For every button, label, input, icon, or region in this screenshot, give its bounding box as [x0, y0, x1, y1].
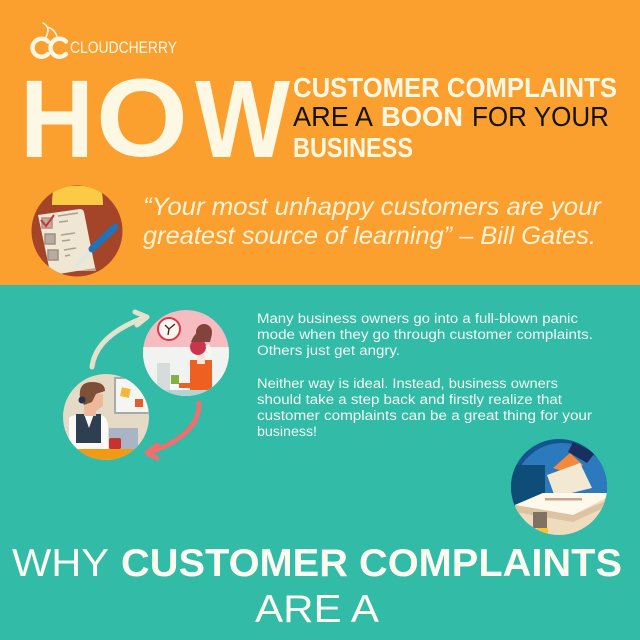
- icon: checklist and pen: [32, 186, 122, 276]
- icon: upset customer on phone: [143, 310, 229, 397]
- arrow: curved to lower circle: [147, 403, 199, 458]
- title line 2: ARE A: [293, 101, 374, 132]
- paragraph 1: Many business owners go into a full-blown panic: [257, 311, 578, 326]
- heading: why customer complaints: WHY: [12, 542, 109, 585]
- logo: CloudCherry: [33, 23, 177, 57]
- paragraph 1: [257, 311, 593, 358]
- icon: support agent with headset: [63, 374, 155, 461]
- title: HOW: W: [195, 58, 290, 181]
- title line 2: [293, 101, 609, 132]
- arrow: curved to upper circle: [92, 312, 147, 367]
- title: HOW: H: [20, 58, 94, 181]
- title line 2: BOON: [381, 101, 463, 132]
- icon: cherry logo: [33, 23, 66, 57]
- panel: teal section: [0, 285, 640, 640]
- heading: are a: ARE A: [255, 588, 379, 631]
- paragraph 2: should take a step back and firstly realize that: [257, 392, 562, 407]
- title: customer complaints: [293, 72, 617, 163]
- icon: ballot box: [511, 439, 607, 535]
- body text: [257, 311, 593, 439]
- paragraph 2: Neither way is ideal. Instead, business owners: [257, 376, 558, 391]
- title: HOW: O: [96, 57, 188, 180]
- title line 3: BUSINESS: [293, 132, 413, 163]
- logo wordmark: CLOUDCHERRY: [70, 39, 177, 57]
- paragraph 1: Others just get angry.: [257, 343, 400, 358]
- quote: [143, 193, 603, 250]
- title line 1: CUSTOMER COMPLAINTS: [293, 72, 617, 103]
- title: HOW: [20, 57, 290, 181]
- panel: orange header: [0, 0, 640, 285]
- quote line 1: “Your most unhappy customers are your: [143, 193, 603, 221]
- paragraph 2: business!: [257, 424, 317, 439]
- paragraph 2: [257, 376, 593, 439]
- title line 2: FOR YOUR: [472, 101, 609, 132]
- paragraph 1: mode when they go through customer complaints.: [257, 327, 593, 342]
- quote line 2: greatest source of learning” – Bill Gates.: [143, 222, 596, 250]
- paragraph 2: customer complaints can be a great thing for your: [257, 408, 593, 423]
- heading: why customer complaints: CUSTOMER COMPLAINTS: [121, 542, 622, 585]
